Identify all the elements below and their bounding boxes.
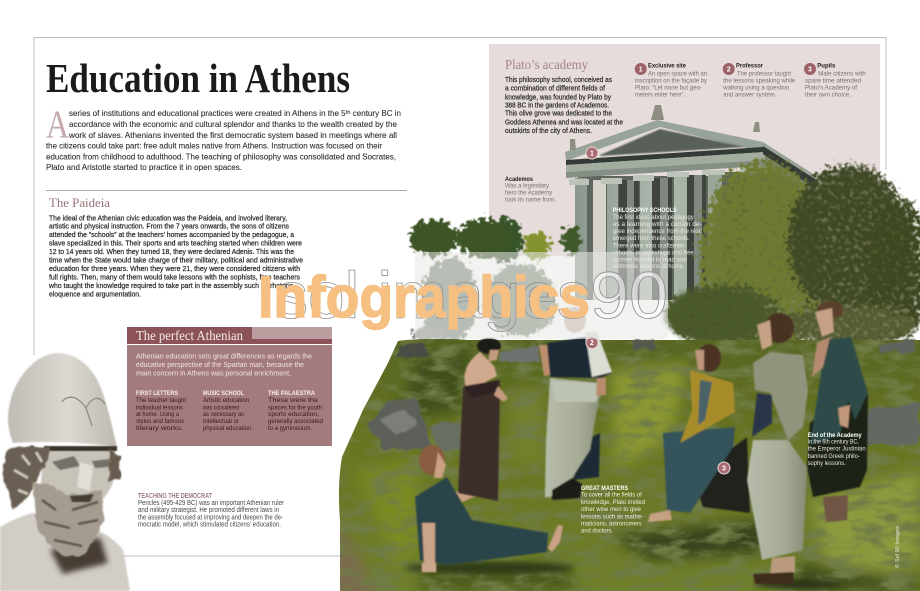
callout: teaching the democrat: mocratic model, which stimulated citizens’ education. xyxy=(138,522,281,528)
beard xyxy=(32,482,104,557)
callout 3: pupils: spare time attended xyxy=(805,78,861,85)
path and grass patches xyxy=(330,350,920,591)
Plato's academy text xyxy=(505,57,623,135)
callout: philosophy schools: The first ideas about pedagogy xyxy=(613,214,694,221)
callout: great masters: maticians, astronomers xyxy=(581,521,642,528)
panel: The Paideia: slave specialized in this. Their sports and arts teaching started when children were xyxy=(49,238,302,247)
figure: Plato, central standing teacher xyxy=(539,307,612,500)
watermark xyxy=(258,252,668,339)
side wall xyxy=(762,150,816,300)
column: music school: was considered xyxy=(202,404,239,412)
callout 3: pupils: Male citizens with xyxy=(818,71,866,78)
column: first letters: individual lessons xyxy=(136,404,184,412)
panel intro: educative perspective of the Spartan man, because the xyxy=(136,360,304,369)
figure: seated man with yellow cloak xyxy=(648,344,750,522)
callout 2: professor: Professor xyxy=(736,63,763,70)
figure: seated pupil on the ground xyxy=(405,445,575,574)
column: music school: MUSIC SCHOOL xyxy=(203,390,244,397)
callout 3: pupils: Pupils xyxy=(817,63,835,70)
Plato's academy text: 388 BC in the gardens of Academos. xyxy=(505,100,609,109)
callout 2: professor xyxy=(722,63,795,99)
callout: Academos: took its name from. xyxy=(505,197,556,204)
intro text block xyxy=(46,103,401,172)
callout 2: professor: The professor taught xyxy=(737,71,791,78)
column: first letters: The teacher taught xyxy=(136,397,186,404)
grass texture xyxy=(339,339,920,591)
image credit: © Sol 90 Images xyxy=(894,526,901,568)
intro text block: work of slaves. Athenians invented the first democratic system based in meetings where all xyxy=(68,131,397,140)
column: the palaestra xyxy=(268,390,323,432)
columns xyxy=(575,168,760,300)
tree group in front of the temple xyxy=(665,160,920,356)
callout: Academos xyxy=(505,176,556,204)
number marker 2 xyxy=(586,337,598,349)
watermark: sol images xyxy=(275,258,590,332)
column: first letters: FIRST LETTERS xyxy=(136,390,178,397)
callout: philosophy schools: There were also craftsmen xyxy=(613,242,685,249)
illustration: Plato's academy scene xyxy=(330,105,920,591)
callout 1: exclusive site: An open space with an xyxy=(648,71,707,78)
panel heading: The perfect Athenian xyxy=(136,328,243,343)
column: first letters: stylus and famous xyxy=(136,418,185,425)
column: music school: intellectual or xyxy=(203,418,240,425)
panel: The Paideia: education for three years. When they were 21, they were considered citizens with xyxy=(49,264,300,273)
panel: The perfect Athenian xyxy=(127,327,332,446)
column: first letters: at home. Using a xyxy=(136,411,179,418)
column: music school: Artistic education xyxy=(203,397,249,404)
column: the palaestra: THE PALAESTRA xyxy=(268,390,315,397)
column: first letters: literary works. xyxy=(136,425,183,432)
column: the palaestra: These were the xyxy=(268,397,318,404)
panel intro: main concern in Athens was personal enrichment. xyxy=(136,368,291,378)
callout: teaching the democrat: and military strategist. He promoted different laws in xyxy=(138,507,279,514)
watermark: Infographics xyxy=(258,265,590,330)
number marker 1: 1 xyxy=(590,150,594,158)
figure: pupil in teal robe xyxy=(807,301,868,522)
roof xyxy=(565,120,818,186)
callout: great masters: other wise men to give xyxy=(581,506,641,513)
heading: Plato's academy: Plato’s academy xyxy=(505,57,588,72)
panel: The Paideia: attended the “schools” at the teachers’ homes accompanied by the pedagogue, a xyxy=(49,230,295,239)
callout: philosophy schools: schools, in workshops and free xyxy=(613,249,694,256)
panel: Plato's academy background xyxy=(489,44,880,256)
panel: The Paideia: artistic and physical instruction. From the 7 years onwards, the sons of citizens xyxy=(49,222,289,231)
callout: end of the Academy: the Emperor Justinian xyxy=(808,446,866,453)
panel: The Paideia: who taught the knowledge required to take part in the assembly such as rhetoric, xyxy=(48,281,295,290)
figure: pupil in grey cloak xyxy=(747,313,845,589)
callout: great masters xyxy=(581,485,645,534)
callout 1: exclusive site xyxy=(635,63,708,99)
callout: end of the Academy xyxy=(808,432,866,467)
number marker 3 xyxy=(718,462,730,474)
callout: Academos: Was a legendary xyxy=(505,183,550,190)
Plato's academy text: a combination of different fields of xyxy=(505,84,606,93)
panel: The Paideia: The ideal of the Athenian civic education was the Paideia, and involved literary, xyxy=(49,213,287,222)
trees xyxy=(410,218,580,342)
rocks xyxy=(368,340,920,452)
panel intro: Athenian education sets great differences as regards the xyxy=(136,352,312,360)
Plato's academy text: This olive grove was dedicated to the xyxy=(505,109,612,118)
callout: great masters: knowledge, Plato invited xyxy=(581,499,645,506)
callout: great masters: lessons such as mathe- xyxy=(581,513,643,520)
callout 3: pupils xyxy=(804,63,866,99)
callout: philosophy schools: arithmetic lessons at home. xyxy=(613,263,685,270)
number marker 1 xyxy=(586,147,598,159)
face xyxy=(40,448,116,500)
column: the palaestra: spaces for the youth xyxy=(268,404,322,412)
icon: bust of Pericles xyxy=(0,353,130,591)
callout 3: pupils: 3 xyxy=(808,66,812,74)
panel: The Paideia: 12 to 14 years old. When they turned 18, they were declared Adenis. This was the xyxy=(49,247,294,256)
drop cap: A xyxy=(46,103,69,146)
callout 2: professor: and answer system. xyxy=(723,92,776,99)
callout: teaching the democrat: TEACHING THE DEMOCRAT xyxy=(138,493,213,500)
column: first letters xyxy=(136,390,186,432)
intro text block: accordance with the economic and cultural splendor and thanks to the wealth created by the xyxy=(69,120,398,129)
panel: The Paideia: eloquence and argumentation. xyxy=(49,290,141,299)
callout: teaching the democrat xyxy=(138,493,285,528)
callout: great masters: GREAT MASTERS xyxy=(581,485,628,492)
Plato's academy text: Goddess Athenea and was located at the xyxy=(505,117,623,126)
callout: Academos: hero the Academy xyxy=(505,190,553,197)
callout: great masters: To cover all the fields of xyxy=(581,492,642,499)
Plato's academy text: knowledge, was founded by Plato by xyxy=(505,92,611,101)
callout 2: professor: walking using a question xyxy=(722,85,789,92)
figure: woman in dark robe xyxy=(458,338,508,501)
callout 3: pupils: Plato’s Academy of xyxy=(805,85,857,92)
helmet xyxy=(8,353,117,447)
callout: teaching the democrat: Pericles (495-429 BC) was an important Athenian ruler xyxy=(138,500,285,507)
callout: great masters: and doctors. xyxy=(581,527,613,534)
Plato's academy text: This philosophy school, conceived as xyxy=(505,75,612,84)
callout: philosophy schools: PHILOSOPHY SCHOOLS xyxy=(613,207,677,214)
heading: The Paideia: The Paideia xyxy=(49,195,110,210)
title: Education in Athens xyxy=(46,55,350,101)
panel intro xyxy=(136,352,312,378)
callout: end of the Academy: banned Greek philo- xyxy=(808,453,860,460)
callout 2: professor: 2 xyxy=(727,66,731,74)
callout: philosophy schools xyxy=(612,207,702,270)
number marker 3: 3 xyxy=(722,466,726,472)
callout 2: professor: the lessons speaking while xyxy=(723,78,795,85)
watermark: 90 xyxy=(590,258,668,332)
column: the palaestra: generally associated xyxy=(268,418,323,425)
callout: philosophy schools: emerged from these schools. xyxy=(613,235,690,242)
column: music school: as necessary as xyxy=(203,411,244,418)
intro text block: education from childhood to adulthood. The teaching of philosophy was consolidated and Socrates, xyxy=(46,152,396,162)
number marker 2: 2 xyxy=(590,340,594,347)
callout: teaching the democrat: the assembly focused at improving and deepen the de- xyxy=(138,514,284,521)
callout: philosophy schools: as a learning with a certain de- xyxy=(613,221,702,228)
callout: philosophy schools: gree independence from the rest xyxy=(613,228,701,235)
statues on roof xyxy=(570,105,760,150)
callout: Academos: Academos xyxy=(505,176,533,183)
grass ground xyxy=(339,339,920,591)
temple xyxy=(565,105,818,300)
column: music school: physical education. xyxy=(203,425,253,432)
callout: philosophy schools: women learned to read and xyxy=(612,256,687,263)
intro text block: Plato and Aristotle started to practice it in open spaces. xyxy=(46,163,242,172)
callout 1: exclusive site: 1 xyxy=(639,66,643,74)
column: the palaestra: to a gymnasium. xyxy=(268,425,312,432)
Plato's academy text: outskirts of the city of Athens. xyxy=(505,126,592,135)
callout 1: exclusive site: Plato: “Let none but geo- xyxy=(635,85,702,92)
panel: The Paideia: full rights. Then, many of them would take lessons with the sophists, free teachers xyxy=(49,272,300,281)
column: the palaestra: sports education, xyxy=(268,411,319,418)
intro text block: the citizens could take part: free adult males native from Athens. Instruction was focused on their xyxy=(46,142,382,150)
callout 1: exclusive site: Exclusive site xyxy=(648,63,686,70)
callout: end of the Academy: sophy lessons. xyxy=(808,460,846,467)
pediment sculpture xyxy=(600,129,745,156)
panel: The Paideia xyxy=(48,195,303,299)
panel: The Paideia: time when the State would take charge of their military, political and administrative xyxy=(49,255,303,264)
intro text block: series of institutions and educational practices were created in Athens in the 5ᵗʰ century BC in xyxy=(69,109,401,118)
callout 1: exclusive site: meters enter here”. xyxy=(635,92,685,99)
callout: end of the Academy: In the 6th century BC, xyxy=(808,438,859,445)
callout: end of the Academy: End of the Academy xyxy=(808,432,862,439)
column: music school xyxy=(202,390,253,432)
callout 1: exclusive site: inscription on the façade by xyxy=(635,78,708,85)
callout 3: pupils: their own choice. xyxy=(805,92,851,99)
shoulders xyxy=(0,513,130,591)
hair xyxy=(2,447,50,510)
